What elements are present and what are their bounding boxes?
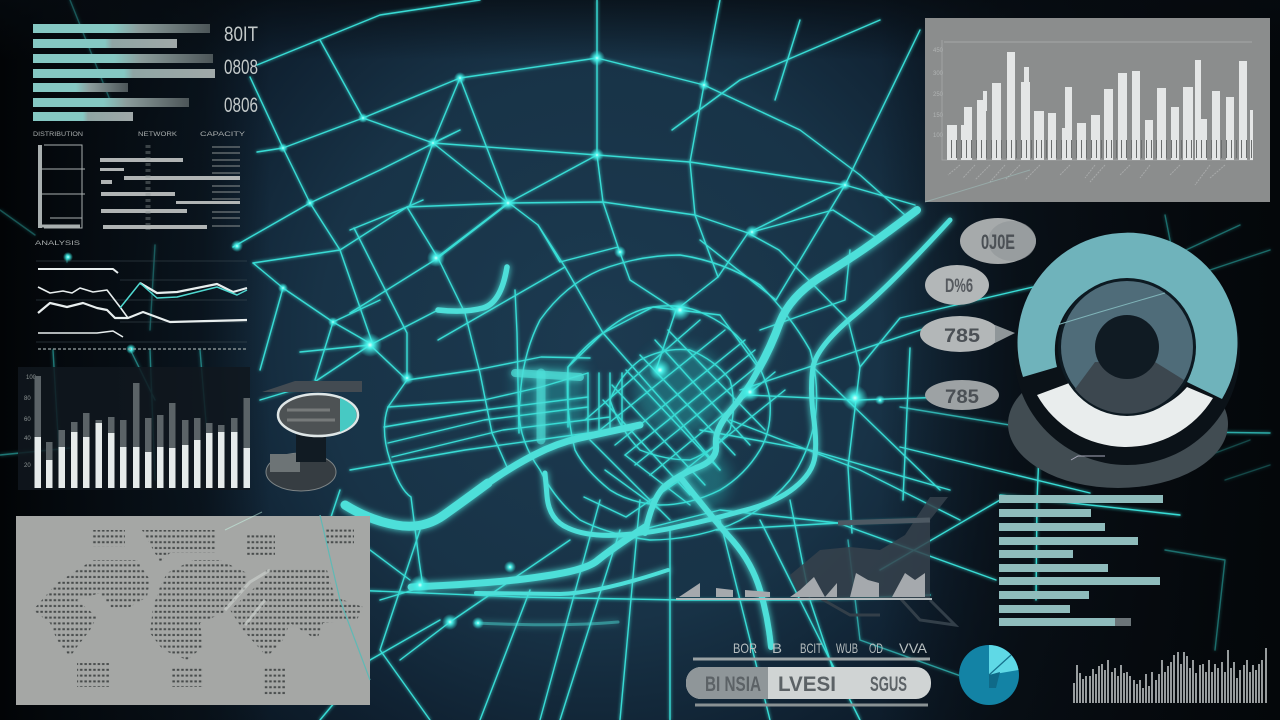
shadow crescent bbox=[1008, 360, 1228, 488]
axis labels: 80 bbox=[24, 396, 31, 402]
column labels: BOR bbox=[733, 640, 757, 656]
column stripes bbox=[947, 140, 1253, 158]
white peaks bbox=[679, 573, 925, 597]
panel: dotted world map bbox=[16, 512, 370, 705]
column labels: WUB bbox=[836, 640, 858, 656]
panel: bottom right horizontal bars bbox=[999, 495, 1163, 626]
column labels: BCIT bbox=[800, 640, 822, 656]
bar values: 0808 bbox=[224, 56, 258, 79]
panel: top right bar chart bbox=[925, 18, 1270, 202]
white arc bbox=[1037, 382, 1213, 447]
axis labels: 100 bbox=[26, 375, 37, 381]
glowing nodes bbox=[63, 50, 1046, 630]
progress bars bbox=[33, 24, 215, 121]
thick cyan rivers bbox=[345, 210, 950, 647]
column labels: VVA bbox=[899, 640, 928, 656]
outer teal arc bbox=[1018, 233, 1238, 399]
outer radial fan bbox=[740, 320, 950, 390]
pill 3: 785 bbox=[944, 326, 980, 347]
pill 1: 0J0E bbox=[981, 231, 1015, 254]
axis labels: 150 bbox=[933, 113, 944, 119]
bottom label strip bbox=[686, 640, 931, 705]
axis labels: 450 bbox=[933, 48, 944, 54]
area chart bbox=[676, 497, 955, 625]
data pill: SGUS bbox=[870, 673, 907, 696]
column headings: ANALYSIS bbox=[35, 241, 80, 247]
panel: line chart bbox=[36, 261, 248, 349]
bar values bbox=[224, 23, 258, 117]
concentric rings bbox=[567, 306, 770, 505]
axis labels bbox=[933, 48, 944, 139]
pill 3 bbox=[920, 316, 1015, 352]
panel: progress bars top left bbox=[33, 23, 258, 121]
column headings bbox=[33, 132, 245, 247]
axis labels: 60 bbox=[24, 417, 31, 423]
data pill: LVESI bbox=[778, 673, 836, 696]
data pill bbox=[686, 667, 931, 699]
column labels: B bbox=[772, 640, 782, 656]
waveform chart bbox=[1074, 648, 1266, 703]
pill 2 bbox=[925, 265, 989, 305]
callout pills bbox=[920, 218, 1036, 410]
pill 4 bbox=[925, 380, 999, 410]
dotted continents bbox=[33, 529, 363, 695]
pill 1 bbox=[960, 218, 1036, 264]
pill 4: 785 bbox=[945, 387, 979, 408]
panel: column chart bbox=[18, 367, 250, 490]
axis labels: 250 bbox=[933, 92, 944, 98]
axis labels: 20 bbox=[24, 463, 31, 469]
center hole bbox=[1095, 315, 1159, 379]
panel: small table chart bbox=[33, 132, 245, 247]
column labels bbox=[733, 640, 928, 656]
teal series bbox=[120, 283, 247, 308]
column headings: DISTRIBUTION bbox=[33, 132, 83, 138]
column headings: CAPACITY bbox=[200, 132, 245, 138]
rotated tick labels bbox=[948, 165, 1225, 185]
icon: cylinder bbox=[262, 381, 362, 491]
mini line chart bbox=[40, 145, 85, 228]
data pill: BI NSIA bbox=[705, 673, 761, 696]
white columns bbox=[34, 423, 250, 488]
tick lines bbox=[148, 145, 240, 230]
white series bbox=[38, 269, 247, 337]
axis labels: 300 bbox=[933, 71, 944, 77]
bar values: 0806 bbox=[224, 94, 258, 117]
pie chart bbox=[959, 645, 1019, 705]
axis labels: 100 bbox=[933, 133, 944, 139]
axis labels bbox=[24, 375, 37, 469]
highlight streaks bbox=[225, 570, 270, 625]
columns bbox=[947, 52, 1253, 160]
bar values: 80IT bbox=[224, 23, 258, 46]
ghost columns bbox=[34, 376, 250, 488]
soft central glow bbox=[515, 345, 730, 510]
inner ring bbox=[1058, 278, 1196, 416]
axis labels: 40 bbox=[24, 436, 31, 442]
horizontal bars bbox=[100, 158, 240, 229]
column labels: OD bbox=[869, 640, 883, 656]
donut chart bbox=[1008, 233, 1240, 488]
pill 2: D%6 bbox=[945, 276, 973, 297]
column headings: NETWORK bbox=[138, 132, 177, 138]
